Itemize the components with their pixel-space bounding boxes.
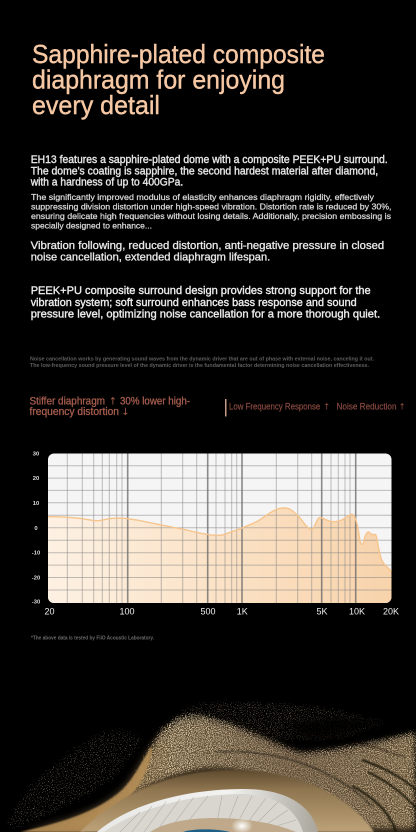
text block: sapphire dome intro: with a hardness of up to 400GPa. (30, 177, 183, 189)
x axis labels: 20 (44, 606, 55, 616)
note: noise cancellation explanation: Noise cancellation works by generating sound waves from the dynamic driver that are out of phase with external noise, canceling it out. (30, 357, 374, 363)
x axis labels: 20K (383, 606, 399, 616)
note: noise cancellation explanation: The low-frequency sound pressure level of the dynamic driver is the fundamental factor determining noise cancellation effectiveness. (30, 363, 369, 369)
earbud: highlight (231, 818, 253, 832)
earbud: inner collar (150, 818, 296, 832)
text block: PEEK+PU surround: PEEK+PU composite surround design provides strong support for the (31, 285, 371, 297)
earbud: rib pattern (120, 796, 296, 832)
title: diaphragm for enjoying (32, 64, 285, 94)
callout: stiffer diaphragm: frequency distortion (30, 406, 119, 418)
callout: stiffer diaphragm: Stiffer diaphragm (30, 395, 105, 407)
callout: stiffer diaphragm (30, 395, 190, 418)
y axis labels: 20 (33, 476, 39, 482)
y axis labels: -20 (32, 575, 40, 581)
x axis labels: 1K (237, 606, 248, 616)
x axis labels: 100 (119, 606, 135, 616)
sand: sparse upper crest (165, 697, 404, 745)
text block: elasticity details: suppressing division distortion under high-speed vibration. Distortion rate is reduced by 30%, (31, 202, 392, 212)
callout: low frequency response and noise reduction: Low Frequency Response (229, 401, 320, 411)
text block: PEEK+PU surround: vibration system; soft surround enhances bass response and sound (31, 297, 357, 309)
text block: vibration following: noise cancellation, extended diaphragm lifespan. (31, 252, 270, 264)
y axis labels: 10 (33, 501, 39, 507)
response curve line (48, 508, 392, 571)
x axis labels: 5K (316, 606, 328, 616)
text block: vibration following: Vibration following, reduced distortion, anti-negative pressure in closed (31, 240, 384, 252)
sand: dense bright band (22, 709, 416, 832)
text block: elasticity details: specially designed to enhance... (31, 220, 152, 230)
text block: elasticity details: The significantly improved modulus of elasticity enhances diaphragm rigidity, effectively (31, 192, 375, 202)
sand: tone underlay of bright band (24, 719, 416, 832)
x axis labels: 500 (200, 606, 216, 616)
footnote: *The above data is tested by FiiO Acoustic Laboratory. (31, 635, 155, 641)
earbud: outer rim (97, 789, 318, 832)
y axis labels: -10 (32, 551, 40, 557)
x axis labels: 10K (349, 606, 365, 616)
text block: elasticity details (31, 192, 392, 230)
chart panel (48, 454, 392, 603)
y axis labels: 30 (33, 451, 39, 457)
text block: vibration following (31, 240, 384, 264)
y axis labels (32, 451, 40, 606)
text block: sapphire dome intro: The dome's coating is sapphire, the second hardest material after diamond, (31, 166, 378, 178)
grid lines (48, 454, 392, 603)
note: noise cancellation explanation (30, 357, 374, 369)
text block: sapphire dome intro (30, 154, 388, 189)
callout: stiffer diaphragm: ↑ (109, 396, 117, 407)
callout: stiffer diaphragm: 30% lower high- (120, 395, 190, 407)
y axis labels: -30 (32, 600, 40, 606)
dark ripple gaps (215, 733, 416, 832)
major grid lines (128, 454, 356, 603)
divider bar (225, 399, 226, 416)
text block: elasticity details: ensuring delicate high frequencies without losing details. Additionally, precision embossing is (31, 211, 391, 221)
sand: sparse left lobe (0, 725, 150, 832)
earbud: ribbed ring (104, 794, 303, 832)
title: Sapphire-plated composite (32, 39, 325, 69)
earbud: blue dome (183, 829, 230, 832)
y axis labels: 0 (34, 526, 38, 532)
callout: low frequency response and noise reduction: ↑ (398, 402, 406, 412)
callout: stiffer diaphragm: ↓ (121, 407, 130, 418)
x axis labels (44, 606, 399, 616)
text block: PEEK+PU surround (31, 285, 380, 321)
text block: PEEK+PU surround: pressure level, optimizing noise cancellation for a more thorough quiet. (31, 309, 380, 321)
recessed bowl around earbud (80, 770, 374, 832)
title (32, 39, 325, 120)
text block: sapphire dome intro: EH13 features a sapphire-plated dome with a composite PEEK+PU surround. (31, 154, 388, 166)
callout: low frequency response and noise reduction: Noise Reduction (336, 401, 397, 411)
frequency response chart (32, 451, 399, 616)
illustration: sand wave and earbud driver (0, 697, 416, 832)
sand: golden lower band (20, 746, 152, 832)
callout: low frequency response and noise reduction: ↑ (323, 402, 330, 412)
callout: low frequency response and noise reduction (229, 401, 406, 412)
response curve fill (48, 508, 392, 603)
dark shadow behind crest (285, 718, 398, 739)
title: every detail (32, 90, 160, 120)
